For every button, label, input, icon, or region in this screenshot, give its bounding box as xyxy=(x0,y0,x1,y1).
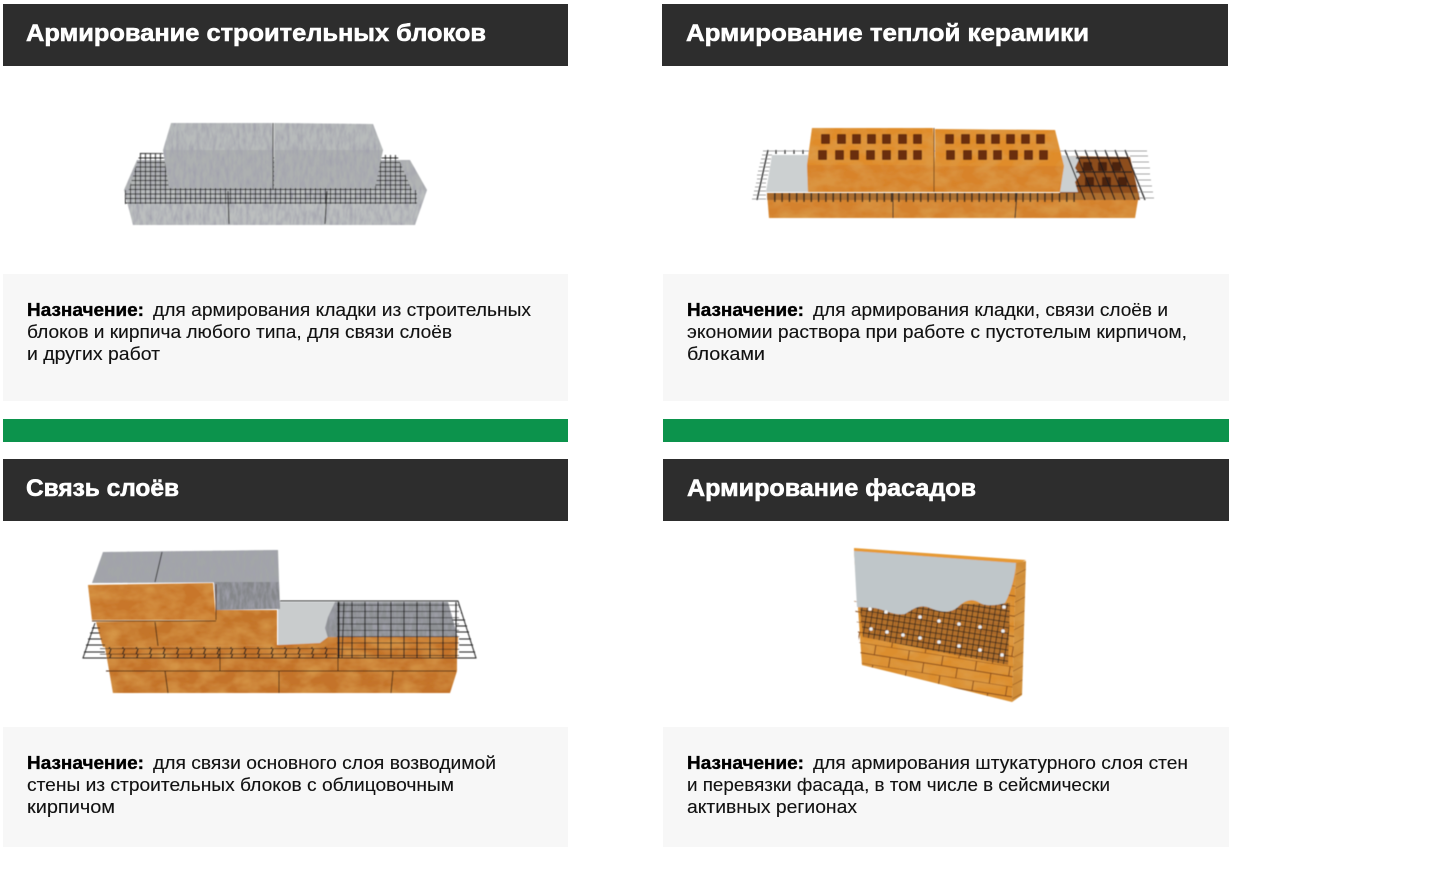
heading xyxy=(662,4,1228,66)
description panel: стены из строительных блоков с облицовочным xyxy=(27,775,454,795)
heading: Армирование теплой керамики xyxy=(686,20,1089,47)
illustration: building blocks with mesh xyxy=(124,123,427,225)
heading: Армирование фасадов xyxy=(687,475,976,502)
description panel: для связи основного слоя возводимой xyxy=(153,753,496,773)
description panel: экономии раствора при работе с пустотелым кирпичом, xyxy=(687,322,1187,342)
illustration: plastered facade with mesh xyxy=(854,548,1026,702)
illustration: layered wall with mesh xyxy=(83,550,476,693)
description panel: и перевязки фасада, в том числе в сейсмически xyxy=(687,775,1110,795)
description panel: и других работ xyxy=(27,344,160,364)
description panel: для армирования штукатурного слоя стен xyxy=(813,753,1188,773)
panel: warm ceramic reinforcement xyxy=(662,4,1229,442)
description panel: блоков и кирпича любого типа, для связи слоёв xyxy=(27,322,452,342)
heading xyxy=(3,4,568,66)
description panel: для армирования кладки, связи слоёв и xyxy=(813,300,1168,320)
panel: block reinforcement xyxy=(3,4,568,442)
description panel: Назначение: xyxy=(687,753,804,773)
description panel xyxy=(663,274,1229,401)
green bar xyxy=(3,419,568,442)
description panel: кирпичом xyxy=(27,797,115,817)
description panel xyxy=(3,727,568,847)
description panel: блоками xyxy=(687,344,765,364)
green bar xyxy=(663,419,1229,442)
description panel: Назначение: xyxy=(27,753,144,773)
heading xyxy=(3,459,568,521)
panel: layer connection xyxy=(3,459,568,847)
heading xyxy=(663,459,1229,521)
description panel: для армирования кладки из строительных xyxy=(153,300,531,320)
heading: Армирование строительных блоков xyxy=(26,20,486,47)
description panel xyxy=(663,727,1229,847)
illustration: hollow ceramic bricks with mesh xyxy=(752,128,1154,218)
panel: facade reinforcement xyxy=(663,459,1229,847)
description panel: активных регионах xyxy=(687,797,857,817)
heading: Связь слоёв xyxy=(26,475,179,502)
description panel: Назначение: xyxy=(687,300,804,320)
description panel xyxy=(3,274,568,401)
description panel: Назначение: xyxy=(27,300,144,320)
